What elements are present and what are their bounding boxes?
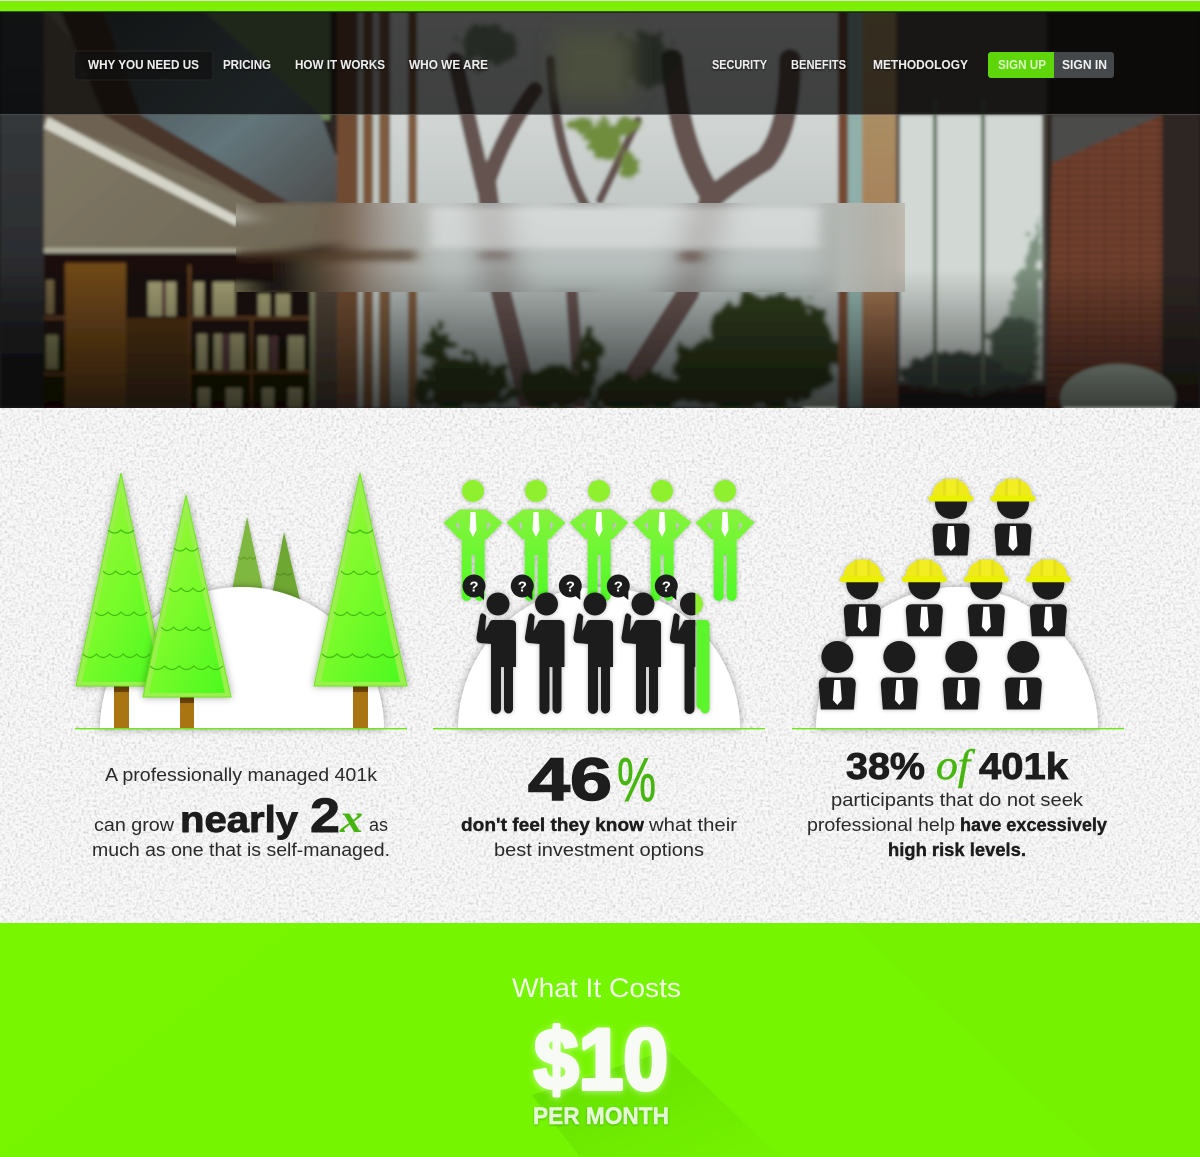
text block: 46 percent: don't feel they know [461,814,645,835]
tree right [314,473,407,728]
black people row [476,592,710,714]
nav links [88,58,969,72]
question speech bubbles: ? [518,578,527,596]
question speech bubbles: ? [566,578,575,596]
panel: hero photo background [0,0,1200,432]
tree middle [143,495,231,728]
text block: 38 percent of 401k: 401k [979,746,1068,787]
text block: 38 percent of 401k: participants that do not seek [831,789,1084,810]
long shadow [532,1050,780,1157]
top row with hard hats [928,479,1036,556]
text block: 38 percent of 401k: of [936,743,976,789]
nav links: METHODOLOGY [873,58,969,72]
ground line [792,728,1124,729]
ground line [75,728,407,729]
white hill [458,587,740,729]
tree left [76,473,166,728]
panel: stats section background [0,408,1200,923]
text block: 46 percent: % [617,746,656,815]
white hill [816,587,1098,729]
middle row with hard hats [840,560,1071,636]
text block: 46 percent: 46 [528,746,612,813]
text block: 2x growth: nearly [180,799,298,840]
text block: 38 percent of 401k: have excessively [960,814,1108,835]
buttons: sign up and sign in [988,52,1114,78]
green people row [444,480,754,601]
panel: top green bar [0,0,1200,12]
bottom row without hats [819,641,1042,710]
heading: What It Costs [512,973,681,1003]
text block: 46 percent: what their [648,814,737,835]
price: $10 [534,1012,668,1108]
nav links: WHY YOU NEED US [88,58,199,72]
panel: navigation bar [0,12,1200,115]
chart: trees on a hill [75,473,407,729]
text block: 38 percent of 401k: professional help [807,814,955,835]
chart: green people vs unsure black people [433,480,765,729]
chart: workers with hard hats [792,479,1124,729]
nav links: BENEFITS [791,58,846,72]
small background tree [232,517,263,590]
per month: PER MONTH [533,1103,669,1130]
nav links: SECURITY [712,58,768,72]
blurred logo [556,32,634,99]
text block: 2x growth: 2 [310,790,340,843]
nav links: HOW IT WORKS [295,58,385,72]
text block: 38 percent of 401k: 38% [846,746,925,787]
question speech bubbles: ? [469,578,479,596]
text block: 46 percent [461,746,737,860]
text block: 2x growth [92,764,390,860]
half black half green person [670,592,710,714]
nav button: why you need us [74,51,213,80]
question speech bubbles: ? [662,578,671,596]
text block: 2x growth: x [339,796,363,841]
buttons: sign up and sign in: SIGN IN [1062,58,1107,72]
text block: 2x growth: as [369,814,388,835]
text block: 2x growth: much as one that is self-managed. [92,839,390,860]
text block: 46 percent: best investment options [494,839,704,860]
panel: pricing section [0,923,1200,1157]
nav links: WHO WE ARE [409,58,488,72]
buttons: sign up and sign in: SIGN UP [998,58,1046,72]
text block: 38 percent of 401k [807,743,1108,860]
small background tree [271,532,300,600]
ground line [433,728,765,729]
question speech bubbles: ? [614,578,623,596]
text block: 38 percent of 401k: high risk levels. [888,839,1026,860]
text block: 2x growth: A professionally managed 401k [105,764,378,785]
nav links: PRICING [223,58,271,72]
question speech bubbles [462,574,678,600]
text block: 2x growth: can grow [94,814,175,835]
white hill [100,587,384,729]
